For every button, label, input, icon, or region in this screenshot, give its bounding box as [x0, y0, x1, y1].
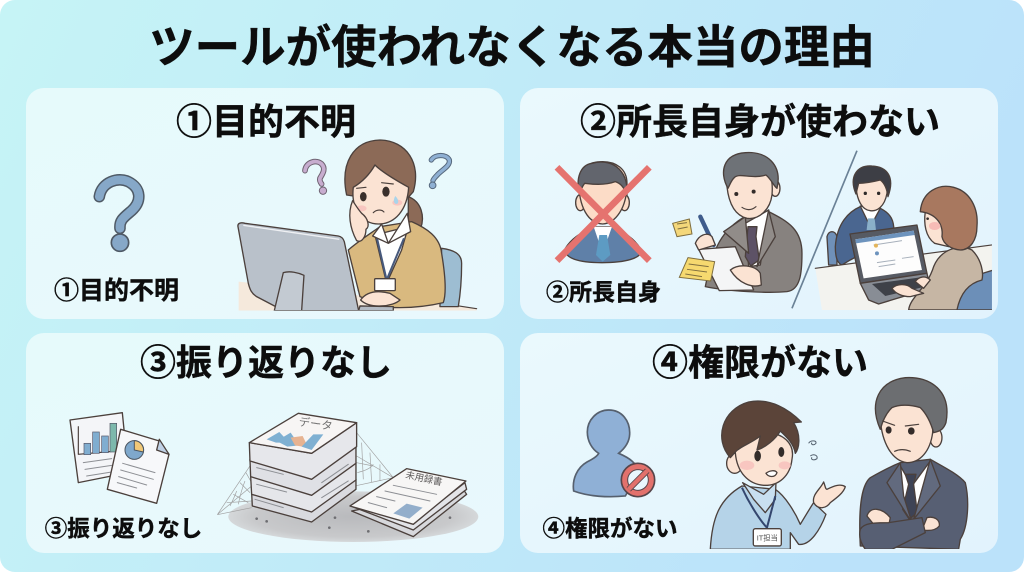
ID badge	[753, 529, 781, 546]
desk	[239, 282, 477, 311]
face	[353, 165, 409, 224]
shirt and lanyard	[375, 228, 407, 278]
icon: blue question mark	[429, 155, 449, 189]
illustration: IT staff explaining to manager	[710, 378, 968, 549]
panel: 所長自身が使わない	[520, 88, 998, 319]
laptop	[850, 225, 930, 304]
icon: crossed-out manager	[557, 162, 649, 263]
label: 権限がない: ④権限がない	[542, 516, 678, 542]
notepad	[699, 247, 754, 291]
heading: 目的不明: ①目的不明	[176, 101, 356, 142]
ID badge: IT担当	[757, 534, 778, 543]
young staff	[835, 166, 894, 265]
ponytail	[408, 197, 422, 228]
monitor stand	[274, 272, 304, 311]
unused documents	[350, 469, 467, 537]
manager arms crossed	[860, 378, 968, 549]
label: 目的不明: ①目的不明	[54, 277, 179, 305]
typing hand	[361, 292, 400, 306]
monitor	[238, 223, 359, 311]
desk	[815, 245, 992, 310]
hand on cheek	[350, 201, 368, 241]
title: ツールが使われなくなる本当の理由	[149, 22, 875, 73]
panel: 振り返りなし	[26, 333, 504, 553]
chair	[440, 248, 462, 307]
cobwebs	[217, 433, 393, 515]
IT staff	[710, 401, 845, 549]
panel: 権限がない	[520, 333, 998, 553]
raised hand	[813, 482, 845, 508]
hair	[345, 140, 416, 197]
illustration: manager writing on notepad	[673, 153, 802, 292]
heading: 権限がない: ④権限がない	[652, 342, 868, 383]
icon: purple question mark	[305, 162, 327, 194]
cardigan	[348, 222, 445, 308]
label: 所長自身: ②所長自身	[546, 279, 661, 305]
woman	[892, 186, 983, 310]
hands and pen	[700, 217, 714, 245]
sticky notes	[673, 219, 692, 237]
heading: 所長自身が使わない: ②所長自身が使わない	[580, 101, 940, 142]
floor shadow	[228, 491, 478, 542]
heading: 振り返りなし: ③振り返りなし	[140, 342, 392, 383]
icon: user with prohibited sign	[573, 410, 655, 497]
icon: report documents	[70, 413, 169, 503]
paper stack	[249, 413, 357, 522]
paper stack: データ	[298, 414, 334, 433]
unused documents: 未用録書	[405, 469, 443, 487]
suit	[705, 212, 802, 292]
dust	[257, 518, 450, 531]
collar	[373, 213, 411, 243]
illustration: dusty stack of data	[217, 413, 478, 542]
label: 振り返りなし: ③振り返りなし	[45, 516, 202, 542]
illustration: staff using laptop	[815, 166, 994, 310]
icon: large question mark	[99, 180, 139, 251]
panel: 目的不明	[26, 88, 504, 319]
divider: diagonal line	[792, 151, 857, 308]
chair	[955, 270, 994, 310]
illustration: confused woman at computer	[238, 140, 477, 311]
sweat marks	[809, 441, 817, 460]
head	[771, 180, 780, 196]
